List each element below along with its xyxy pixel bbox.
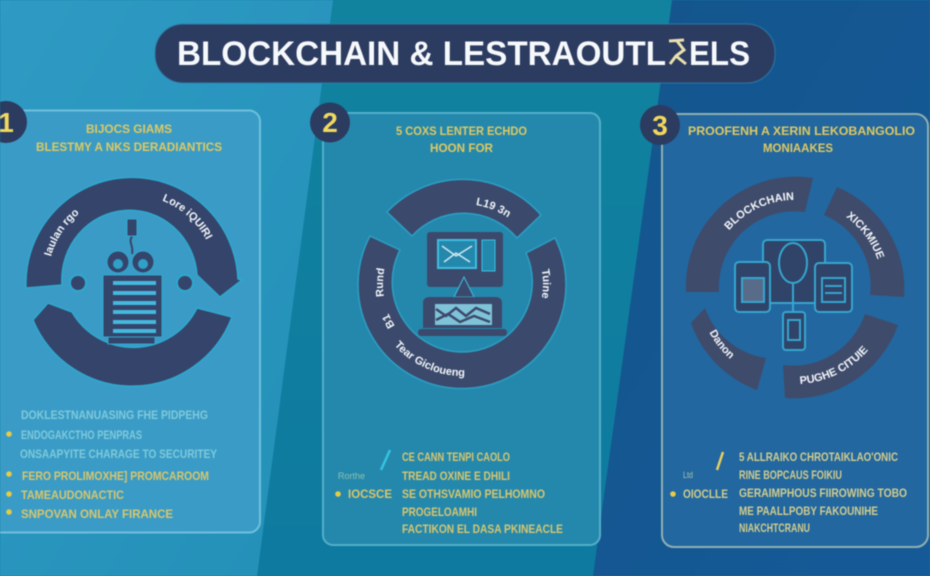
icon: computer	[418, 232, 507, 336]
icon: left node	[70, 275, 86, 291]
badge 3	[640, 105, 680, 145]
ring diagram 1	[26, 177, 242, 386]
ring diagram 2: Tear Gicloueng	[396, 340, 465, 380]
ring diagram 1: Lore iQUIRI	[162, 193, 214, 240]
panel 3 notes: OIOCLLE	[683, 489, 728, 501]
panel 1 list: ONSAAPYITE CHARAGE TO SECURITEY	[20, 449, 217, 461]
badge 3: 3	[652, 110, 668, 141]
icon: connected devices	[735, 240, 852, 350]
panel 2 notes: Rorthe	[338, 471, 365, 481]
panel 2 notes: IOCSCE	[348, 489, 392, 501]
ring diagram 3: PUGHE CITUIE	[799, 345, 868, 385]
panel 1 heading	[36, 122, 222, 154]
panel 3 notes: NIAKCHTCRANU	[739, 523, 810, 535]
ring diagram 2: L19 3n	[476, 197, 511, 218]
panel 2 notes: FACTIKON EL DASA PKINEACLE	[402, 524, 563, 536]
title banner: ELS	[689, 35, 750, 73]
ring diagram 2: Rund	[375, 267, 385, 298]
panel 3 notes: GERAIMPHOUS FIIROWING TOBO	[739, 488, 907, 500]
panel 3 heading: MONIAAKES	[763, 141, 833, 155]
panel 2 notes: SE OTHSVAMIO PELHOMNO	[402, 489, 545, 501]
panel 2 notes	[335, 450, 563, 536]
panel 3 notes: ME PAALLPOBY FAKOUNIHE	[739, 506, 878, 518]
panel 1 heading: BIJOCS GIAMS	[86, 122, 172, 136]
panel 3 heading: PROOFENH A XERIN LEKOBANGOLIO	[688, 124, 915, 138]
icon: title glyph figure	[669, 40, 686, 64]
panel 1 heading: BLESTMY A NKS DERADIANTICS	[36, 140, 222, 154]
panel 3 notes: 5 ALLRAIKO CHROTAIKLAO'ONIC	[739, 452, 898, 464]
ring diagram 3: BLOCKCHAIN	[723, 192, 794, 230]
panel 2 notes: TREAD OXINE E DHILI	[402, 471, 510, 483]
ring diagram 2	[357, 178, 567, 390]
icon: server stack	[103, 219, 162, 344]
panel 3 notes: RINE BOPCAUS FOIKIU	[739, 470, 842, 482]
ring diagram 2: B1	[382, 313, 395, 330]
panel 1 list: TAMEAUDONACTIC	[21, 490, 124, 502]
panel 3 heading	[688, 124, 915, 155]
panel 1 list: FERO PROLIMOXHE] PROMCAROOM	[22, 471, 209, 483]
badge 1	[0, 101, 27, 143]
ring diagram 3: XICKMIUE	[846, 210, 885, 260]
icon: right node	[177, 275, 193, 291]
title banner	[155, 24, 775, 83]
ring diagram 3	[686, 176, 905, 399]
badge 2	[310, 102, 350, 142]
title banner: BLOCKCHAIN & LESTRAOUTL	[177, 35, 666, 73]
panel 1 list: ENDOGAKCTHO PENPRAS	[21, 430, 142, 442]
panel 1 list: DOKLESTNANUASING FHE PIDPEHG	[21, 410, 208, 422]
panel 1 list	[6, 410, 217, 521]
panel 1	[0, 100, 262, 534]
panel 2	[310, 102, 602, 546]
badge 2: 2	[322, 107, 338, 138]
panel 3 notes: Ltd	[683, 470, 693, 480]
ring diagram 1: Iaulan rgo	[43, 210, 79, 256]
panel 2 notes: CE CANN TENPI CAOLO	[402, 452, 510, 464]
panel 2 heading: 5 COXS LENTER ECHDO	[396, 124, 527, 138]
ring diagram 3: Danon	[709, 328, 734, 360]
ring diagram 2: Tuine	[541, 268, 552, 299]
panel 3	[640, 104, 930, 549]
panel 2 notes: PROGELOAMHI	[402, 507, 477, 519]
panel 2 heading	[396, 124, 527, 155]
panel 2 heading: HOON FOR	[430, 141, 493, 155]
panel 3 notes	[670, 452, 907, 535]
panel 1 list: SNPOVAN ONLAY FIRANCE	[21, 509, 173, 521]
